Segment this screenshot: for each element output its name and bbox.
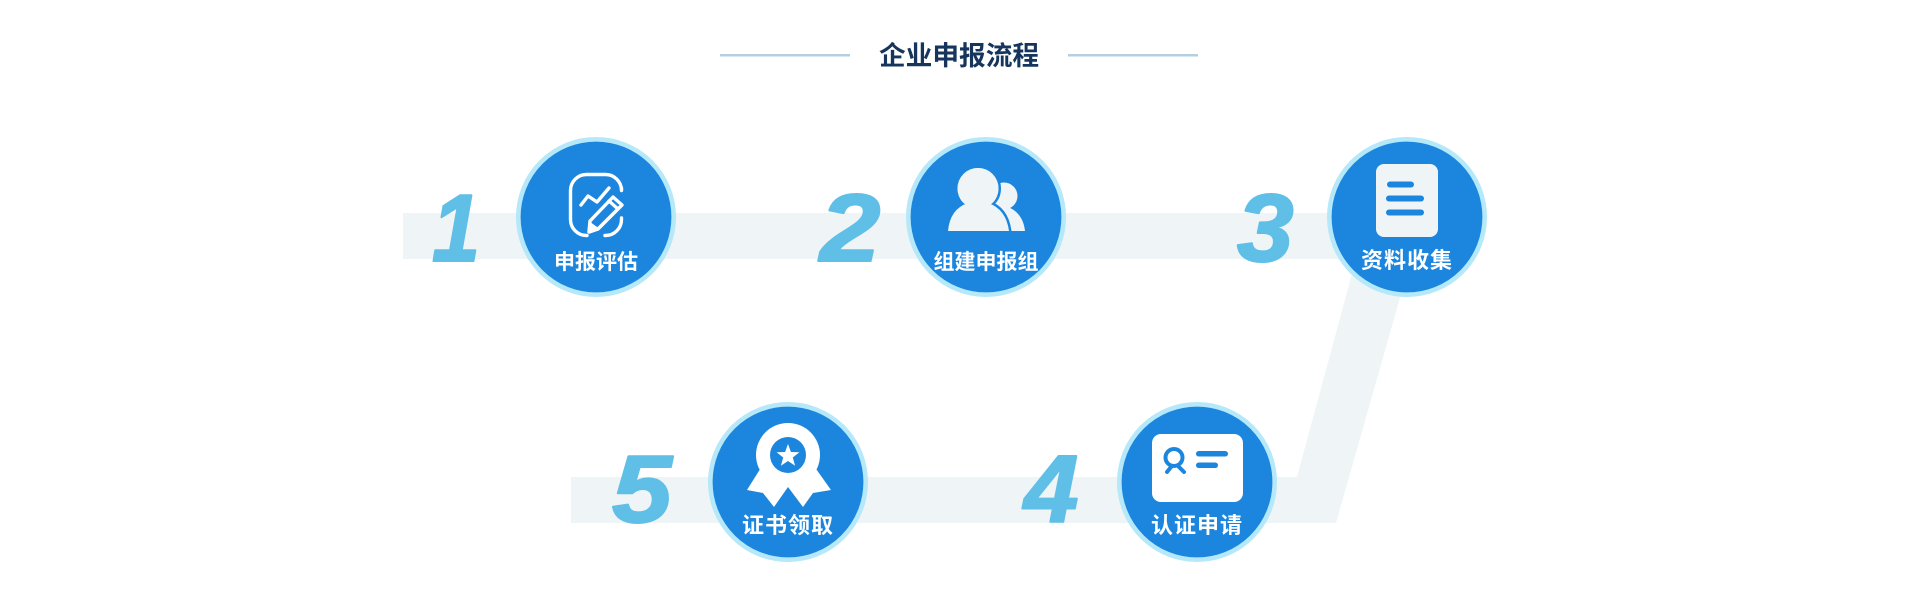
- number 5: 5: [612, 435, 673, 543]
- label 2: 组建申报组: [934, 251, 1038, 274]
- title: 企业申报流程: [879, 41, 1039, 71]
- icon: people: [948, 168, 1025, 231]
- label 4: 认证申请: [1151, 513, 1243, 538]
- number 4: 4: [1022, 435, 1078, 543]
- circle 4: [1119, 404, 1275, 560]
- icon: certificate card: [1152, 434, 1243, 502]
- flow path band: [403, 213, 1411, 523]
- circle 3: [1329, 139, 1485, 295]
- number 3: 3: [1237, 174, 1294, 281]
- circle 1: [518, 139, 674, 295]
- icon: document: [1376, 164, 1438, 237]
- step 4: 认证申请: [1022, 404, 1275, 560]
- step 1: 申报评估: [432, 139, 674, 295]
- label 3: 资料收集: [1361, 248, 1453, 273]
- icon: pencil on chart: [570, 174, 622, 236]
- label 1: 申报评估: [554, 251, 638, 274]
- circle 2: [908, 139, 1064, 295]
- step 2: 组建申报组: [818, 139, 1064, 295]
- number 2: 2: [818, 174, 880, 282]
- circle 5: [710, 404, 866, 560]
- number 1: 1: [432, 175, 480, 282]
- label 5: 证书领取: [742, 513, 834, 538]
- step 5: 证书领取: [612, 404, 866, 560]
- step 3: 资料收集: [1237, 139, 1485, 295]
- icon: award ribbon: [747, 423, 831, 507]
